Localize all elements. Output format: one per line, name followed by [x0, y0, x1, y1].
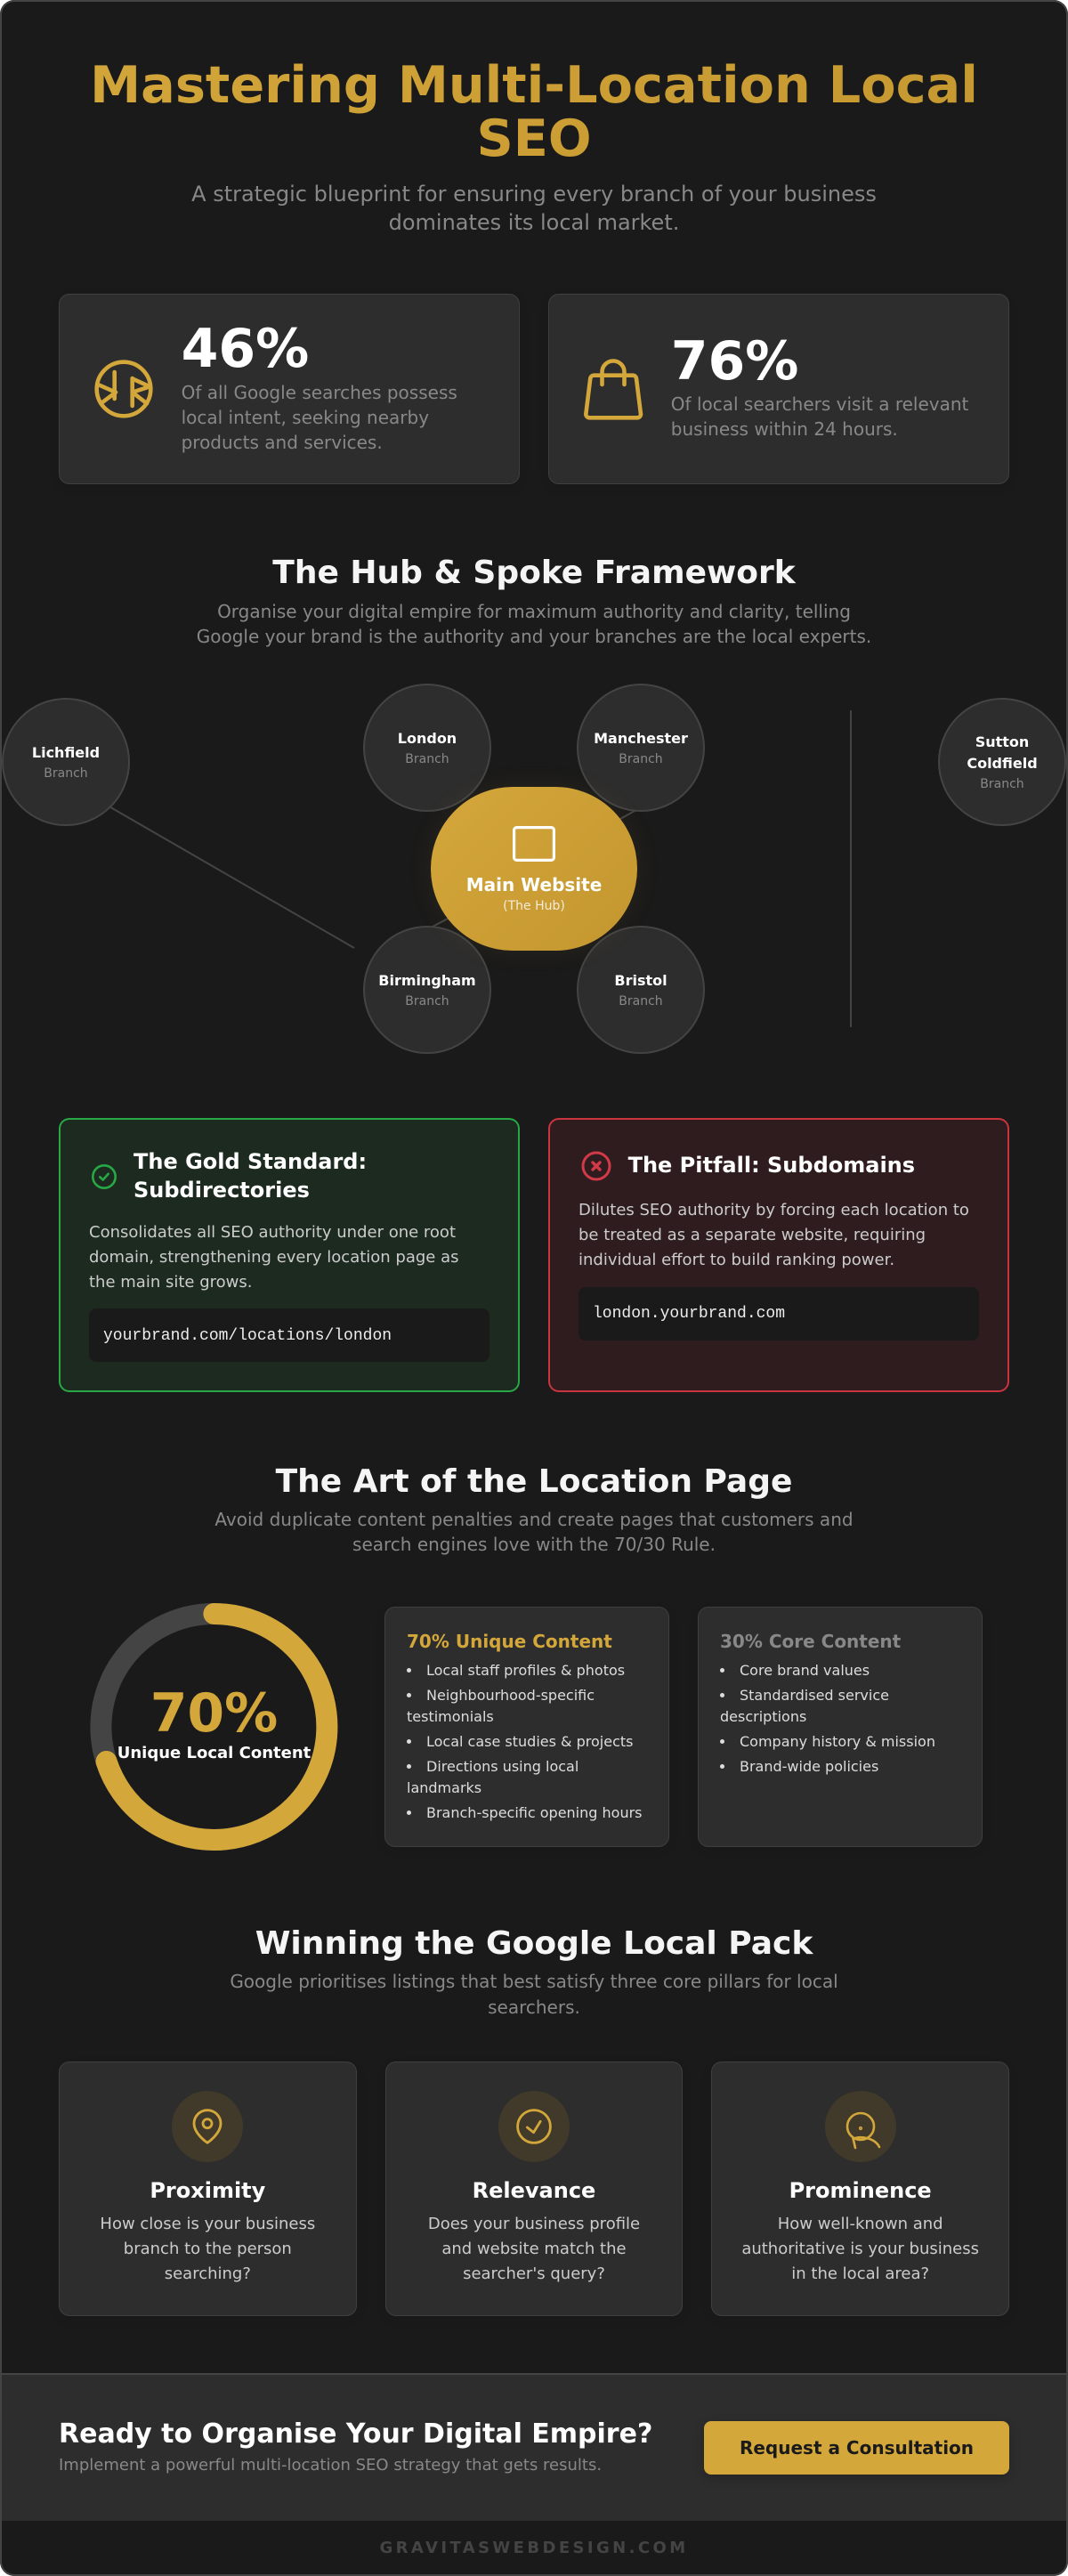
panel: gold standard subdirectories: [59, 1118, 520, 1392]
panel: 70% unique content: [384, 1607, 669, 1847]
heading: Relevance: [473, 2178, 595, 2203]
donut chart: 70%: [91, 1603, 338, 1851]
heading: The Hub & Spoke Framework: [272, 555, 796, 591]
section heading: hub and spoke: [197, 555, 871, 647]
heading: 70% Unique Content: [407, 1631, 612, 1652]
node: Bristol: [577, 926, 705, 1054]
section heading: location page: [214, 1463, 854, 1555]
heading: The Pitfall: Subdomains: [628, 1153, 915, 1178]
intro text: search engines love with the 70/30 Rule.: [352, 1534, 716, 1555]
list: landmarks: [407, 1779, 481, 1796]
panel: stat 76%: [548, 294, 1009, 484]
description: Consolidates all SEO authority under one root: [89, 1223, 456, 1241]
stat description: local intent, seeking nearby: [182, 407, 429, 428]
list: Local staff profiles & photos: [426, 1662, 625, 1679]
list: Core brand values: [740, 1662, 870, 1679]
header: [90, 55, 978, 235]
panel: prominence: [711, 2062, 1009, 2316]
description: [578, 1201, 969, 1269]
intro text: Avoid duplicate content penalties and create pages that customers and: [214, 1508, 854, 1529]
description: [89, 1223, 459, 1291]
stat value: 76%: [671, 330, 798, 393]
node: Manchester: [577, 684, 705, 812]
node: Sutton Coldfield: Branch: [980, 776, 1024, 790]
cta subtext: Implement a powerful multi-location SEO strategy that gets results.: [59, 2456, 602, 2475]
intro text: [214, 1508, 854, 1555]
stat description: products and services.: [182, 432, 383, 453]
panel: pitfall subdomains: [548, 1118, 1009, 1392]
description: be treated as a separate website, requiring: [578, 1226, 926, 1244]
description: How well-known and: [778, 2215, 943, 2233]
call to action band: [0, 2373, 1068, 2521]
description: How close is your business: [100, 2215, 315, 2233]
icon: check circle: [498, 2091, 570, 2162]
icon: browser window: [513, 826, 555, 862]
list: Standardised service: [740, 1687, 889, 1704]
intro text: searchers.: [488, 1997, 580, 2018]
hub and spoke diagram: [2, 684, 1066, 1054]
node: Sutton Coldfield: Coldfield: [967, 755, 1038, 771]
heading: Subdirectories: [134, 1178, 310, 1203]
icon: x circle: [582, 1152, 611, 1180]
description: the main site grows.: [89, 1273, 252, 1291]
donut label: Unique Local Content: [117, 1744, 311, 1762]
subtitle: dominates its local market.: [389, 210, 679, 235]
stat value: 46%: [182, 318, 309, 380]
section heading: local pack: [230, 1925, 838, 2018]
hub label: Main Website: [466, 874, 602, 895]
description: [100, 2215, 315, 2283]
node: London: [363, 684, 491, 812]
description: [428, 2215, 640, 2283]
node: Birmingham: Birmingham: [378, 972, 476, 988]
subtitle: A strategic blueprint for ensuring every branch of your business: [191, 182, 877, 207]
panel: proximity: [59, 2062, 357, 2316]
description: authoritative is your business: [741, 2240, 979, 2258]
description: domain, strengthening every location page as: [89, 1248, 459, 1266]
intro text: Google prioritises listings that best satisfy three core pillars for local: [230, 1971, 838, 1992]
list: [407, 1662, 643, 1821]
hub sublabel: (The Hub): [503, 899, 565, 913]
description: individual effort to build ranking power.: [578, 1251, 894, 1269]
button: [704, 2421, 1009, 2475]
stat description: business within 24 hours.: [671, 418, 898, 440]
heading: The Art of the Location Page: [276, 1463, 792, 1500]
icon: map pin: [172, 2091, 243, 2162]
stat description: Of all Google searches possess: [182, 382, 457, 403]
subtitle: [191, 182, 877, 235]
intro text: Organise your digital empire for maximum authority and clarity, telling: [217, 600, 851, 621]
node: Sutton Coldfield: Sutton: [975, 733, 1029, 749]
url example: [578, 1287, 979, 1341]
node: Lichfield: Branch: [44, 766, 88, 780]
node: Sutton Coldfield: [938, 698, 1066, 826]
node: Birmingham: [363, 926, 491, 1054]
list: Brand-wide policies: [740, 1758, 878, 1775]
node: London: Branch: [405, 751, 449, 766]
node: Lichfield: [2, 698, 130, 826]
list: Directions using local: [426, 1758, 578, 1775]
node: Manchester: Branch: [619, 751, 663, 766]
icon: check circle: [92, 1164, 117, 1189]
list: Branch-specific opening hours: [426, 1804, 643, 1821]
node: Bristol: Branch: [619, 993, 663, 1008]
node: Manchester: Manchester: [594, 730, 688, 746]
intro text: Google your brand is the authority and your branches are the local experts.: [197, 626, 871, 647]
panel: stat 46%: [59, 294, 520, 484]
heading: 30% Core Content: [720, 1631, 901, 1652]
stat description: [182, 382, 457, 453]
title: Mastering Multi-Location Local: [90, 55, 978, 115]
url example: [89, 1308, 490, 1362]
stat description: Of local searchers visit a relevant: [671, 393, 968, 415]
intro text: [230, 1971, 838, 2018]
list: testimonials: [407, 1708, 494, 1725]
url example: yourbrand.com/locations/london: [103, 1327, 392, 1345]
donut ring: [91, 1603, 338, 1851]
title: [0, 59, 1068, 166]
panel: relevance: [385, 2062, 683, 2316]
icon: shopping bag: [584, 359, 643, 420]
list: Local case studies & projects: [426, 1733, 633, 1750]
icon: arrows in circle: [94, 360, 153, 418]
stat description: [671, 393, 968, 440]
button: Request a Consultation: [740, 2437, 974, 2459]
url example: london.yourbrand.com: [593, 1305, 785, 1323]
node: Birmingham: Branch: [405, 993, 449, 1008]
list: [720, 1662, 935, 1775]
list: Neighbourhood-specific: [426, 1687, 595, 1704]
description: searcher's query?: [463, 2264, 605, 2283]
list: Company history & mission: [740, 1733, 935, 1750]
donut value: 70%: [150, 1682, 278, 1745]
hub: main website: [431, 787, 637, 951]
heading: Prominence: [789, 2178, 932, 2203]
description: Does your business profile: [428, 2215, 640, 2233]
node: Bristol: Bristol: [614, 972, 668, 988]
description: and website match the: [441, 2240, 627, 2258]
connector lines: [110, 710, 852, 1027]
heading: Proximity: [150, 2178, 265, 2203]
heading: [134, 1149, 367, 1203]
node: London: London: [398, 730, 457, 746]
description: branch to the person: [124, 2240, 292, 2258]
intro text: [197, 600, 871, 647]
node: Lichfield: Lichfield: [32, 744, 100, 760]
heading: Winning the Google Local Pack: [255, 1925, 813, 1962]
cta heading: Ready to Organise Your Digital Empire?: [59, 2418, 652, 2450]
list: descriptions: [720, 1708, 806, 1725]
description: in the local area?: [791, 2264, 929, 2283]
panel: 30% core content: [698, 1607, 983, 1847]
footer brand text: GRAVITASWEBDESIGN.COM: [379, 2539, 689, 2557]
description: searching?: [165, 2264, 251, 2283]
description: Dilutes SEO authority by forcing each location to: [578, 1201, 969, 1219]
description: [741, 2215, 979, 2283]
heading: The Gold Standard:: [134, 1149, 367, 1174]
icon: prominence: [825, 2091, 896, 2162]
title: SEO: [476, 109, 592, 168]
